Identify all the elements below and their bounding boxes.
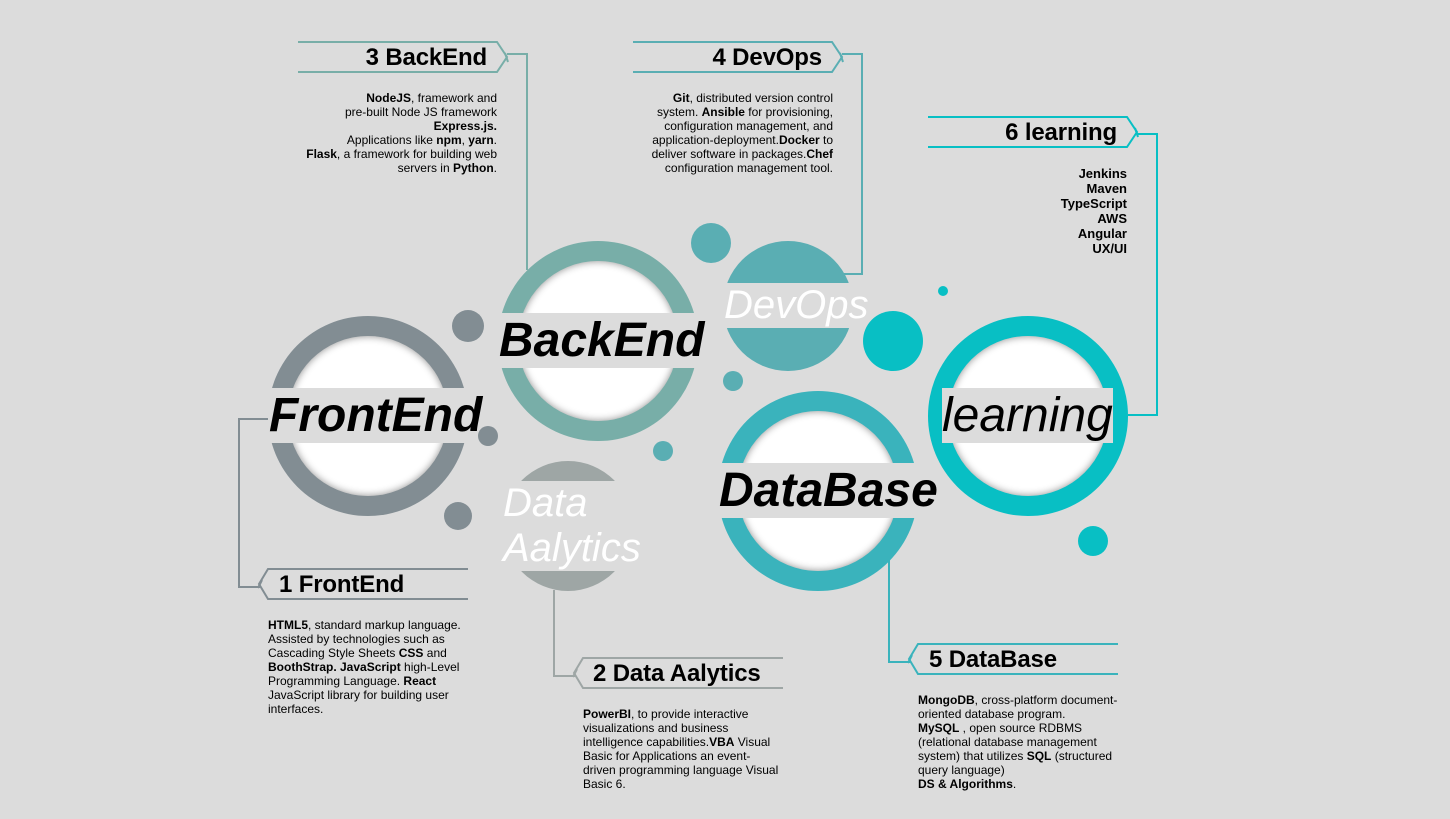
heading: 2 Data Aalytics [593,660,761,687]
description: query language) [918,763,1005,777]
description: Programming Language. React [268,674,436,688]
description: intelligence capabilities.VBA Visual [583,735,770,749]
description: NodeJS, framework and [366,91,497,105]
connector and heading frame [888,560,1118,675]
circle: DataBase [718,391,918,591]
heading: 6 learning [1005,119,1117,146]
description [268,618,461,716]
connector and heading frame [298,41,528,270]
panel: 1 FrontEnd [238,418,468,716]
description: visualizations and business [583,721,728,735]
description: pre-built Node JS framework [345,105,497,119]
tool list: Maven [1087,181,1127,196]
decorative dots: FrontEnd group [444,310,498,530]
description: (relational database management [918,735,1097,749]
description: Assisted by technologies such as [268,632,445,646]
tool list: Angular [1078,226,1127,241]
description: system. Ansible for provisioning, [657,105,833,119]
circle label: DevOps: DevOps [724,283,868,327]
circle: FrontEnd [268,316,468,516]
connector and heading frame [553,590,783,689]
panel: 3 BackEnd [298,41,528,270]
description: MongoDB, cross-platform document- [918,693,1117,707]
circle label: BackEnd: BackEnd [499,314,704,367]
tool list: UX/UI [1092,241,1127,256]
description: deliver software in packages.Chef [652,147,833,161]
description: configuration management, and [664,119,833,133]
description: Applications like npm, yarn. [347,133,497,147]
description: MySQL , open source RDBMS [918,721,1082,735]
circle label: Data Aalytics [501,481,641,571]
circle: learning [928,316,1128,516]
tool list: AWS [1097,211,1127,226]
description: driven programming language Visual [583,763,778,777]
circle: Data Aalytics [503,461,633,591]
description: interfaces. [268,702,323,716]
description [306,91,497,175]
heading: 5 DataBase [929,646,1057,673]
heading: 3 BackEnd [366,44,487,71]
circle label: DataBase: DataBase [719,464,938,517]
panel: 2 Data Aalytics [553,590,783,791]
heading: 4 DevOps [712,44,822,71]
description: Basic for Applications an event- [583,749,750,763]
panel: 6 learning [928,116,1158,416]
description: PowerBI, to provide interactive [583,707,748,721]
description: system) that utilizes SQL (structured [918,749,1112,763]
heading: 1 FrontEnd [279,571,404,598]
decorative dots: DevOps group [653,223,743,461]
connector and heading frame [928,116,1158,416]
description: Git, distributed version control [673,91,833,105]
description: DS & Algorithms. [918,777,1016,791]
description: configuration management tool. [665,161,833,175]
description [583,707,778,791]
circle: DevOps [723,241,853,371]
description: BoothStrap. JavaScript high-Level [268,660,459,674]
connector and heading frame [633,41,863,275]
tool list: TypeScript [1061,196,1127,211]
description: Flask, a framework for building web [306,147,497,161]
description: JavaScript library for building user [268,688,449,702]
circle label: Data Aalytics: Data [503,481,588,525]
connector and heading frame [238,418,468,600]
tool list: Jenkins [1079,166,1127,181]
circle: BackEnd [498,241,698,441]
circle label: Data Aalytics: Aalytics [503,526,641,570]
description: Basic 6. [583,777,626,791]
circle label: learning: learning [942,389,1113,442]
description: Express.js. [434,119,497,133]
panel: 4 DevOps [633,41,863,275]
panel: 5 DataBase [888,560,1118,791]
description: oriented database program. [918,707,1065,721]
description: application-deployment.Docker to [652,133,833,147]
decorative dots: learning group [863,286,1108,556]
description: Cascading Style Sheets CSS and [268,646,447,660]
description [652,91,834,175]
circle label: FrontEnd: FrontEnd [269,389,482,442]
description: HTML5, standard markup language. [268,618,461,632]
description [918,693,1117,791]
description: servers in Python. [398,161,497,175]
tool list [1060,166,1127,256]
